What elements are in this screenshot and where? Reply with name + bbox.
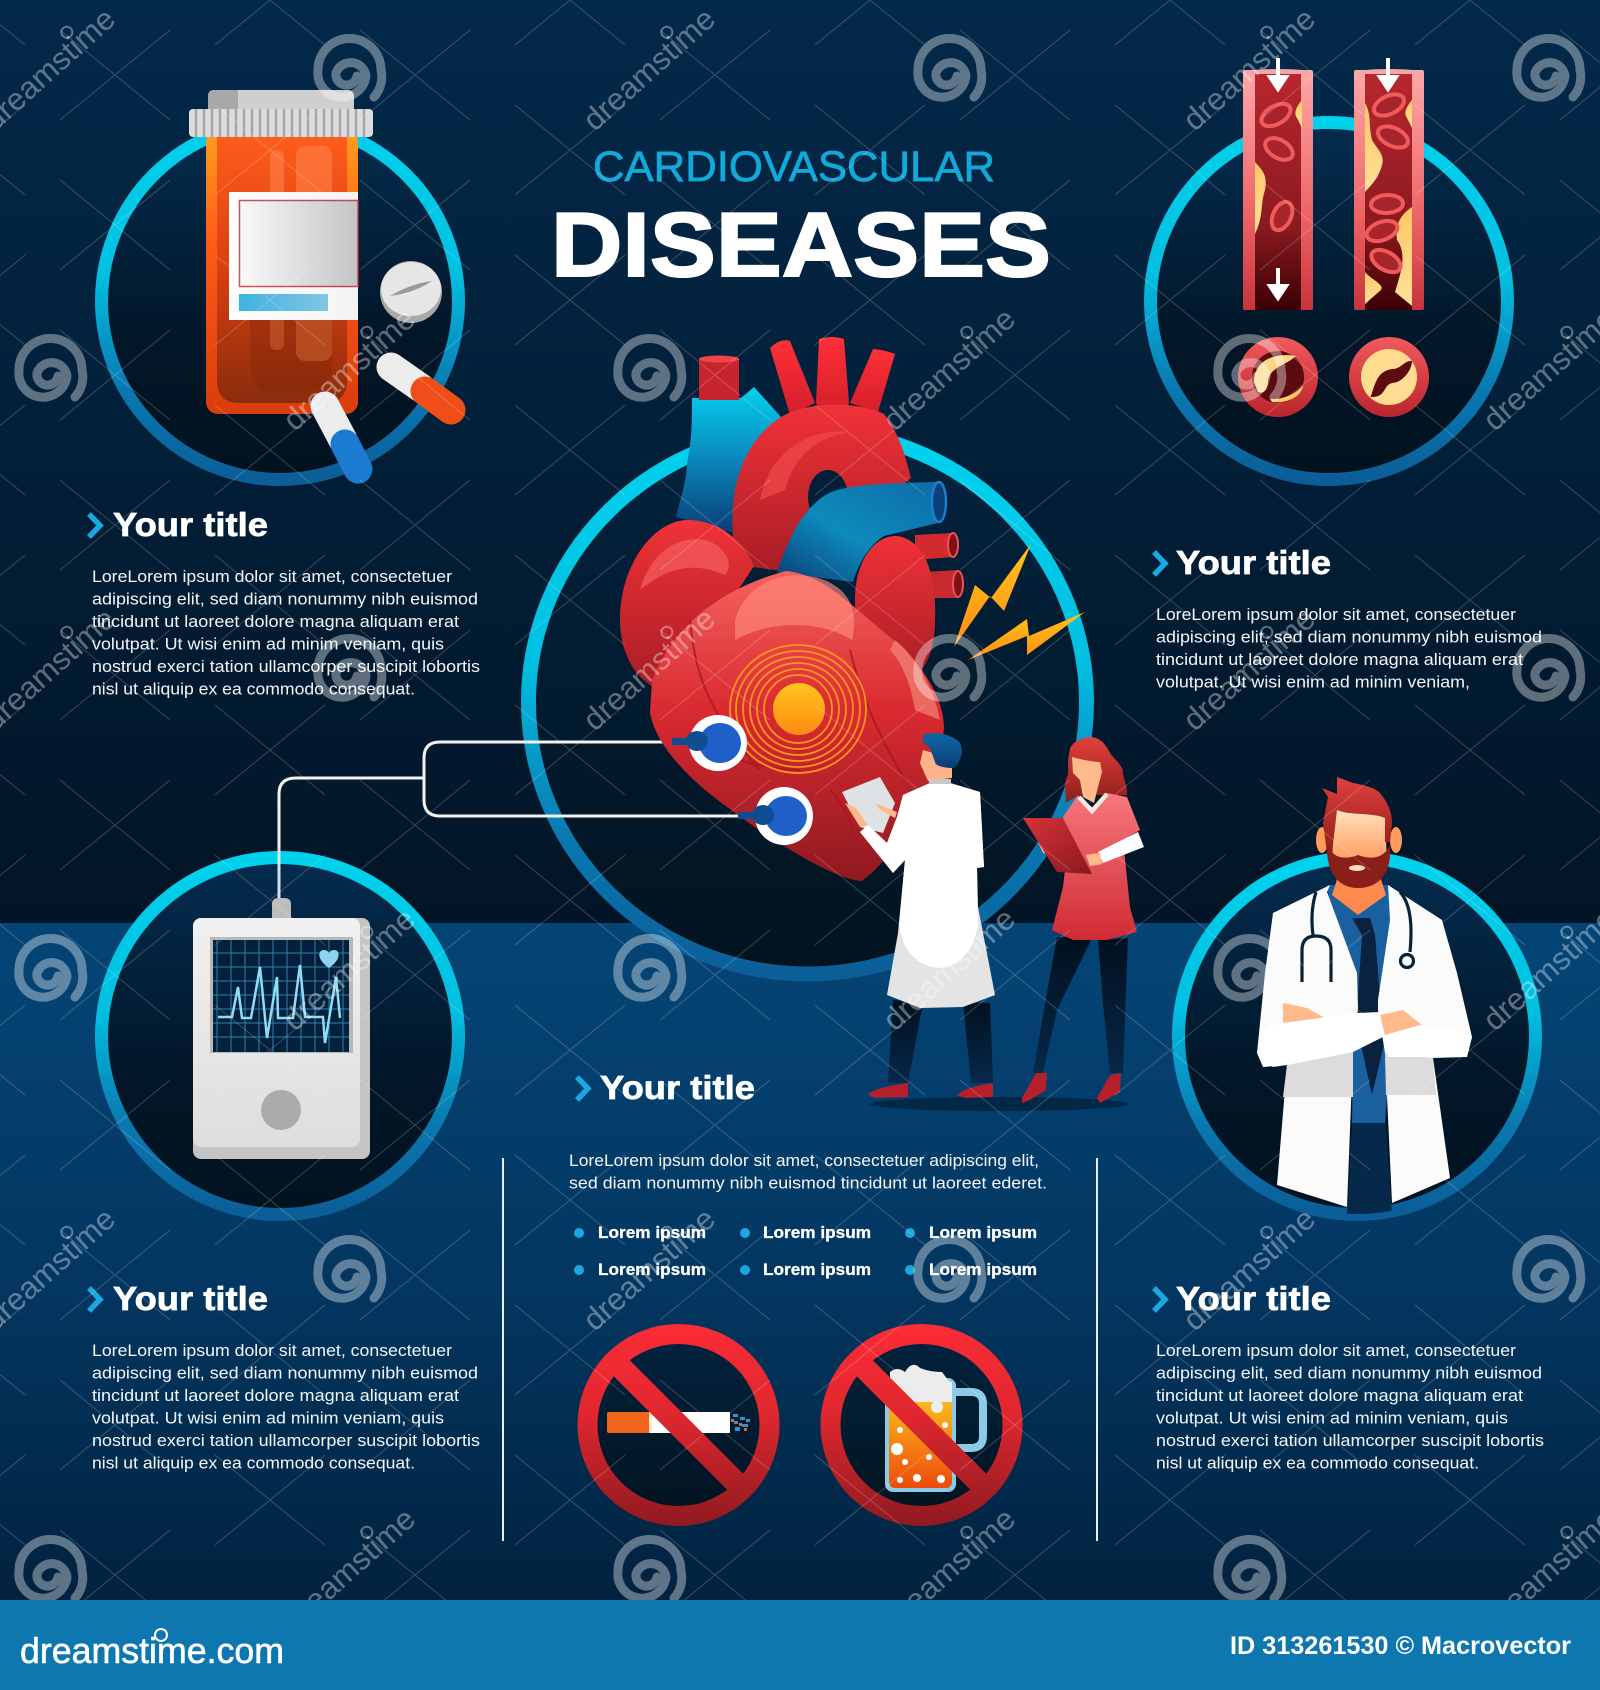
- background: upper dark section: [0, 0, 1600, 923]
- watermark: dreamstime text: dreamstime: [276, 1501, 422, 1637]
- icon: cross-section partial: [1238, 337, 1318, 417]
- ring: arteries: [1150, 122, 1508, 480]
- body copy: adipiscing elit, sed diam nonummy nibh euismod: [1156, 1364, 1542, 1382]
- heart symbol: [319, 950, 339, 968]
- chevron: [1154, 552, 1165, 575]
- figure: bearded doctor: [1257, 777, 1472, 1215]
- body copy: [92, 1342, 480, 1472]
- heading: Your title: [1176, 544, 1331, 581]
- text block: medication: [89, 506, 480, 698]
- ring: monitor: [102, 858, 458, 1214]
- bullet list: Lorem ipsum: [598, 1261, 706, 1279]
- body copy: nisl ut aliquip ex ea commodo consequat.: [92, 1454, 415, 1472]
- body copy: adipiscing elit, sed diam nonummy nibh euismod: [92, 1364, 478, 1382]
- watermark: dreamstime text: dreamstime: [276, 901, 422, 1037]
- monitor grid: [213, 940, 349, 1052]
- footer logo: dreamstime.com: [20, 1630, 284, 1671]
- electrode upper: [672, 715, 747, 771]
- watermark: dreamstime text: dreamstime: [576, 1, 722, 137]
- figure: female doctor: [1022, 737, 1144, 1103]
- text block: monitor: [89, 1280, 480, 1472]
- body copy: nisl ut aliquip ex ea commodo consequat.: [1156, 1454, 1479, 1472]
- body copy: [569, 1152, 1047, 1192]
- chevron: [89, 1288, 100, 1311]
- body copy: adipiscing elit, sed diam nonummy nibh euismod: [1156, 628, 1542, 646]
- wires: [279, 742, 740, 900]
- icon: no smoking: [588, 1334, 770, 1516]
- body copy: tincidunt ut laoreet dolore magna aliquam erat: [1156, 1387, 1523, 1405]
- bullet list: Lorem ipsum: [929, 1224, 1037, 1242]
- body copy: LoreLorem ipsum dolor sit amet, consectetuer: [92, 568, 453, 586]
- watermark: dreamstime text: dreamstime: [1176, 1, 1322, 137]
- beer mug: [885, 1365, 983, 1492]
- title line: cardiovascular: CARDIOVASCULAR: [593, 143, 995, 191]
- body copy: volutpat. Ut wisi enim ad minim veniam, quis: [92, 636, 444, 654]
- cigarette: [607, 1412, 750, 1433]
- icon: blue capsule: [325, 406, 358, 469]
- ring: heart: [528, 430, 1086, 974]
- infarct rings: [730, 645, 866, 773]
- body copy: LoreLorem ipsum dolor sit amet, consectetuer: [1156, 1342, 1517, 1360]
- watermark: dreamstime text: dreamstime: [876, 1501, 1022, 1637]
- figure: male doctor from behind: [842, 733, 995, 1098]
- infarct core: [773, 683, 825, 735]
- body copy: volutpat. Ut wisi enim ad minim veniam, quis: [92, 1410, 444, 1428]
- body copy: [1156, 1342, 1544, 1472]
- body copy: tincidunt ut laoreet dolore magna aliquam erat: [1156, 651, 1523, 669]
- body copy: LoreLorem ipsum dolor sit amet, consectetuer adipiscing elit,: [569, 1152, 1039, 1170]
- panel: medication: [102, 90, 458, 480]
- electrode lower: [738, 787, 813, 845]
- watermark: dreamstime text: dreamstime: [876, 301, 1022, 437]
- body copy: [92, 568, 480, 698]
- prohibition bar: [604, 1351, 752, 1499]
- icon: monitor device: [193, 898, 370, 1159]
- heading: Your title: [1176, 1280, 1331, 1317]
- footer logo mark: [155, 1629, 167, 1641]
- heading: Your title: [600, 1069, 755, 1106]
- icon: pill bottle: [189, 90, 373, 414]
- ring: doctor: [1178, 858, 1536, 1214]
- watermark: dreamstime text: dreamstime: [1176, 1201, 1322, 1337]
- text block: doctor: [1154, 1280, 1544, 1472]
- body copy: LoreLorem ipsum dolor sit amet, consectetuer: [1156, 606, 1517, 624]
- body copy: nostrud exerci tation ullamcorper suscipit lobortis: [92, 658, 480, 676]
- text block: arteries: [1154, 544, 1542, 692]
- figures: shadow: [869, 1097, 1129, 1111]
- panel: heart monitor: [102, 845, 458, 1214]
- bullet list: Lorem ipsum: [929, 1261, 1037, 1279]
- watermark: dreamstime text: dreamstime: [576, 1201, 722, 1337]
- watermark: dreamstime text: dreamstime: [276, 301, 422, 437]
- body copy: tincidunt ut laoreet dolore magna aliquam erat: [92, 613, 459, 631]
- body copy: adipiscing elit, sed diam nonummy nibh euismod: [92, 590, 478, 608]
- watermark: dreamstime text: dreamstime: [1176, 601, 1322, 737]
- title: [551, 143, 1051, 296]
- icon: orange capsule: [391, 367, 451, 410]
- wire down to device: [278, 845, 280, 900]
- body copy: volutpat. Ut wisi enim ad minim veniam, quis: [1156, 1410, 1508, 1428]
- artery: severely blocked: [1354, 58, 1424, 310]
- footer bar: [0, 1600, 1600, 1690]
- icon: anatomical heart: [620, 337, 963, 881]
- background: lower blue section: [0, 923, 1600, 1600]
- text block: centre prevention: [569, 1069, 1047, 1279]
- body copy: sed diam nonummy nibh euismod tincidunt ut laoreet ederet.: [569, 1174, 1047, 1192]
- heading: Your title: [113, 1280, 268, 1317]
- panel: doctor: [1178, 777, 1536, 1215]
- chevron: [577, 1077, 588, 1100]
- heading: Your title: [113, 506, 268, 543]
- icon: lightning bolts: [954, 544, 1085, 660]
- chevron: [89, 514, 100, 537]
- watermark: dreamstime text: dreamstime: [576, 601, 722, 737]
- stethoscope: [1302, 892, 1414, 982]
- body copy: [1156, 606, 1542, 692]
- bullet list: [574, 1224, 1037, 1279]
- artery: partially blocked: [1243, 58, 1313, 310]
- bullet list: Lorem ipsum: [598, 1224, 706, 1242]
- bullet list: Lorem ipsum: [763, 1261, 871, 1279]
- chevron: [1154, 1288, 1165, 1311]
- icon: no alcohol: [830, 1334, 1012, 1516]
- footer credit: ID 313261530 © Macrovector: [1230, 1632, 1571, 1660]
- ECG trace: [218, 965, 340, 1043]
- ring: medication: [102, 122, 458, 480]
- body copy: nostrud exerci tation ullamcorper suscipit lobortis: [92, 1432, 480, 1450]
- icon: round tablet: [380, 261, 442, 323]
- body copy: nisl ut aliquip ex ea commodo consequat.: [92, 680, 415, 698]
- panel: heart: [279, 337, 1086, 974]
- body copy: tincidunt ut laoreet dolore magna aliquam erat: [92, 1387, 459, 1405]
- watermark: dreamstime text: dreamstime: [876, 901, 1022, 1037]
- prohibition bar: [848, 1351, 996, 1499]
- title line: diseases: DISEASES: [551, 195, 1051, 296]
- body copy: LoreLorem ipsum dolor sit amet, consectetuer: [92, 1342, 453, 1360]
- body copy: nostrud exerci tation ullamcorper suscipit lobortis: [1156, 1432, 1544, 1450]
- icon: cross-section severe: [1349, 337, 1429, 417]
- body copy: volutpat. Ut wisi enim ad minim veniam,: [1156, 674, 1470, 692]
- panel: arteries: [1150, 58, 1508, 480]
- bullet list: Lorem ipsum: [763, 1224, 871, 1242]
